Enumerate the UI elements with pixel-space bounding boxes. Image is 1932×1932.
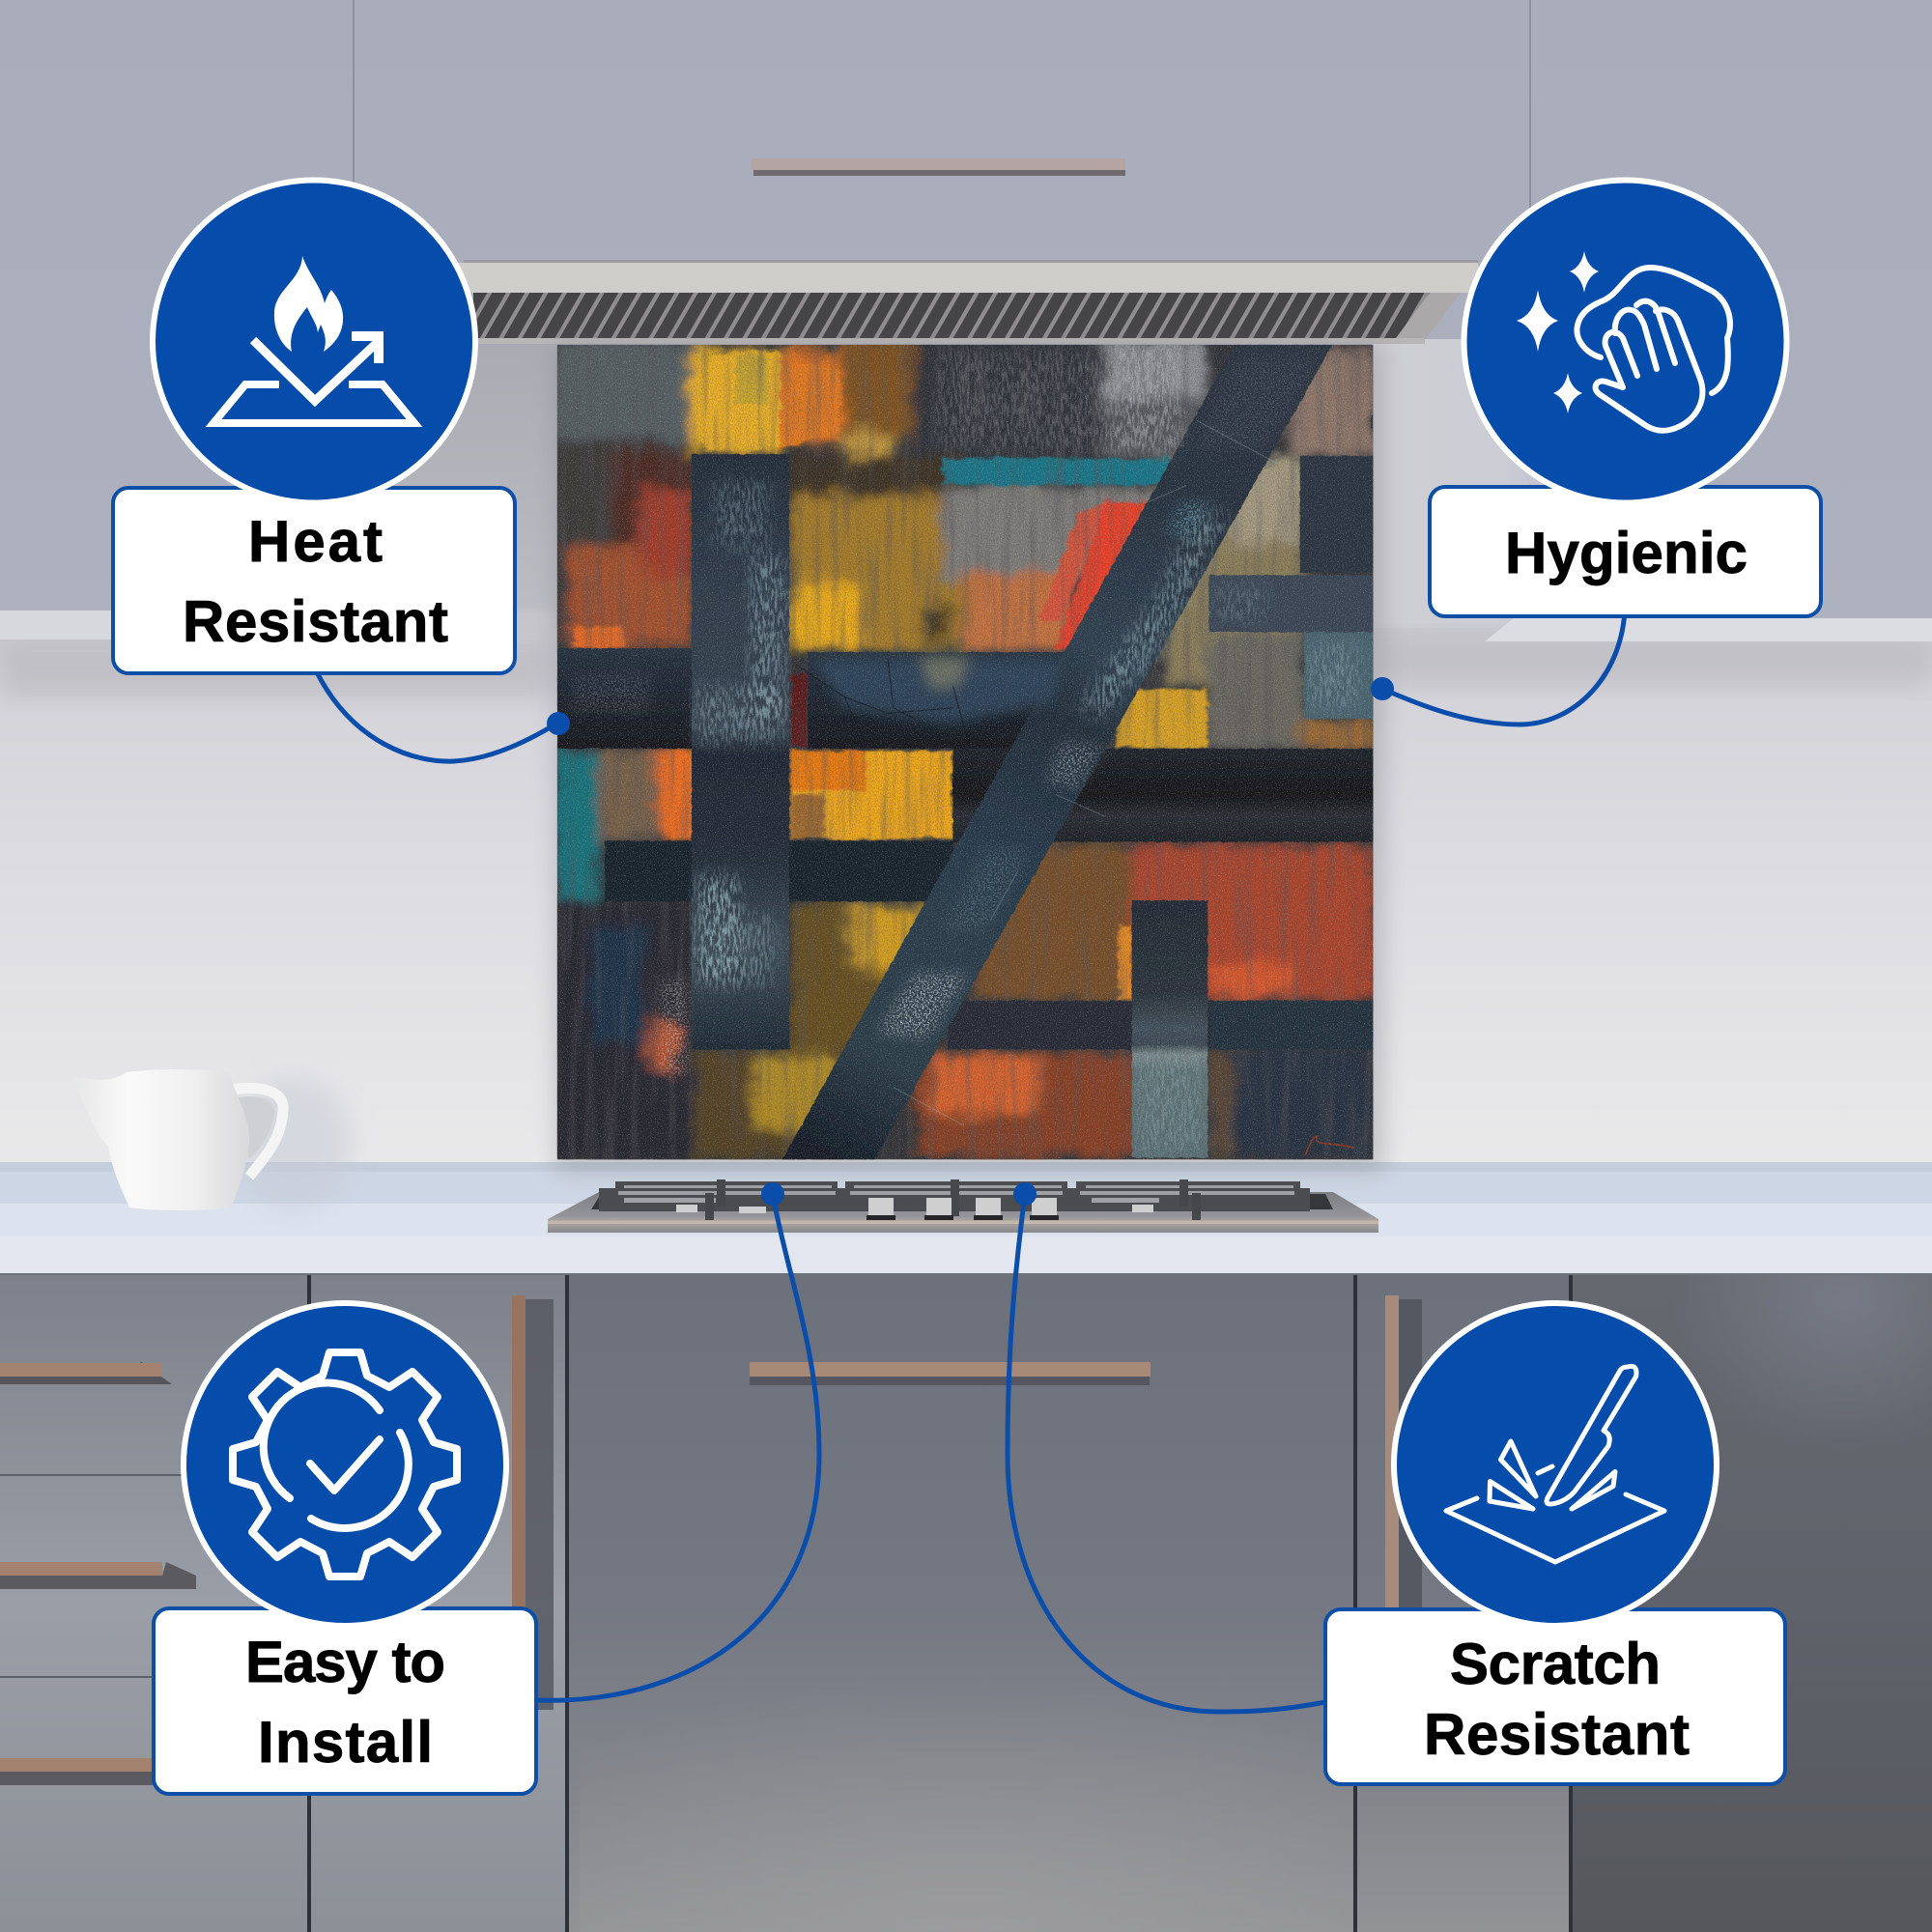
badge: Easy to Install (184, 1303, 506, 1626)
blue glaze on middle band (812, 657, 1062, 724)
callout: Heat Resistant (113, 180, 515, 673)
label box: Hygienic (1430, 487, 1821, 616)
badge: Heat Resistant (153, 180, 475, 502)
abstract painting splashback (552, 339, 1376, 1160)
grain (557, 345, 1373, 1159)
top cabinet handle (752, 158, 1125, 176)
white jug (65, 1069, 353, 1212)
callout: Scratch Resistant (1325, 1303, 1785, 1784)
label: Easy to Install (245, 1630, 445, 1775)
badge: Hygienic (1464, 180, 1787, 502)
label: Heat Resistant: Heat (248, 509, 383, 574)
gas cooktop (548, 1179, 1378, 1233)
connector: Heat Resistant (316, 670, 570, 761)
connector: Scratch Resistant (1008, 1182, 1325, 1712)
badge: Scratch Resistant (1394, 1303, 1717, 1626)
label: Easy to Install: Easy to (245, 1630, 445, 1694)
light scumbles on bands (574, 345, 1362, 1152)
connector: Easy to Install (538, 1182, 819, 1700)
lower cabinets (0, 1275, 1932, 1932)
label: Easy to Install: Install (258, 1710, 433, 1775)
extractor hood (454, 260, 1483, 344)
icon: hand wiping with sparkles (1517, 251, 1730, 431)
counter and backsplash (0, 1162, 1932, 1275)
icon: flame over deflecting surface (213, 256, 414, 423)
label box: Scratch Resistant (1325, 1609, 1785, 1784)
colour fields (552, 339, 1376, 1160)
upper cabinets (0, 0, 1932, 638)
dark structural bands (557, 345, 1373, 1159)
dry-brush streaks over fields (557, 345, 1373, 1159)
icon: gear with check mark (233, 1352, 457, 1577)
label: Hygienic: Hygienic (1505, 521, 1747, 585)
vivid colour blocks (574, 350, 1208, 1001)
callout: Hygienic (1430, 180, 1821, 616)
label: Heat Resistant (183, 509, 448, 654)
icon: knife scratching a surface (1446, 1366, 1664, 1562)
label box: Easy to Install (154, 1608, 536, 1794)
tiled wall (0, 628, 1932, 1169)
label: Scratch Resistant (1424, 1632, 1690, 1767)
shelf strips under upper cabinets (0, 611, 1932, 641)
callout: Easy to Install (154, 1303, 536, 1794)
label: Heat Resistant: Resistant (183, 589, 448, 654)
label box: Heat Resistant (113, 488, 515, 673)
painting shadow (555, 345, 1384, 1172)
label: Scratch Resistant: Resistant (1424, 1702, 1690, 1767)
connector: Hygienic (1371, 611, 1625, 724)
crackle and scratch lines (796, 420, 1354, 1155)
label: Scratch Resistant: Scratch (1450, 1632, 1661, 1696)
cabinet handles (0, 1295, 1422, 1785)
